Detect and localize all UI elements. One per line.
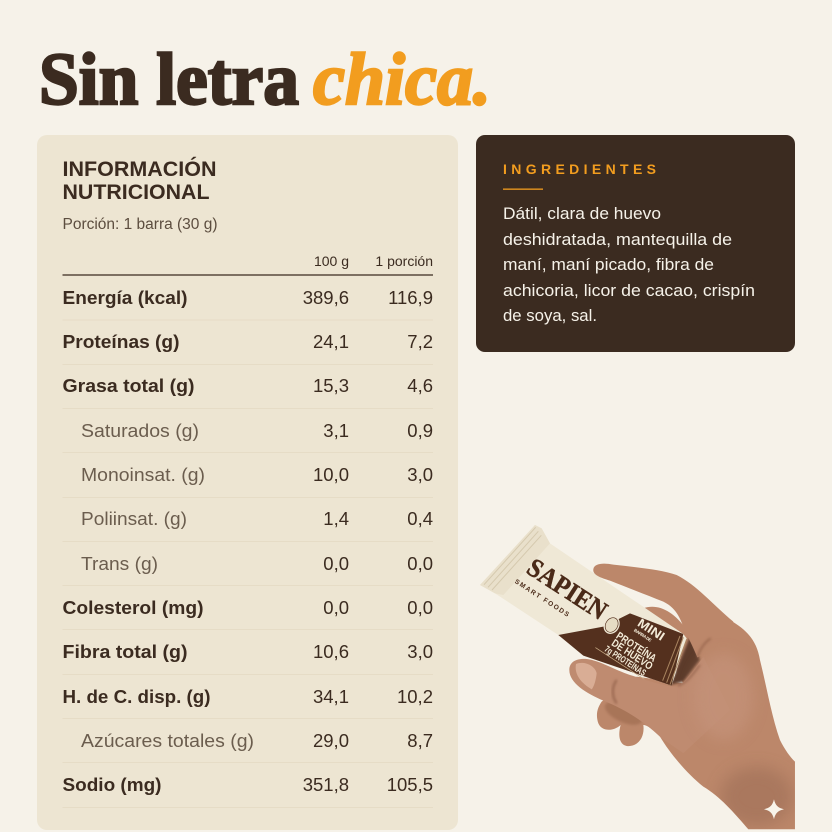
row: saturated [81, 420, 433, 441]
row: cholesterol: Colesterol (mg) [62, 598, 204, 618]
illustration: hand holding bar [480, 525, 795, 829]
row: cholesterol [62, 597, 433, 618]
row: total sugars: 8,7 [407, 730, 433, 751]
serving size: Porción: 1 barra (30 g) [62, 216, 218, 233]
title: Sin letra [39, 39, 299, 121]
ingredients list [503, 204, 755, 325]
thumb [569, 657, 730, 753]
bar brand text: SMART FOODS [513, 578, 571, 619]
row: polyunsaturated: 1,4 [323, 508, 349, 529]
row: trans [81, 553, 433, 574]
row: sodium [62, 774, 433, 795]
row: total sugars: Azúcares totales (g) [81, 731, 254, 751]
row: cholesterol: 0,0 [407, 597, 433, 618]
row: monounsaturated: Monoinsat. (g) [81, 465, 205, 485]
row: total fat: 4,6 [407, 375, 433, 396]
row: energy [62, 287, 433, 308]
heading: ingredients: INGREDIENTES [503, 161, 656, 177]
row: carbohydrates: 34,1 [313, 686, 349, 707]
row: carbohydrates: H. de C. disp. (g) [62, 687, 211, 707]
index finger [593, 564, 733, 657]
bar flavor text: MINI [635, 616, 667, 644]
row: monounsaturated: 10,0 [313, 464, 349, 485]
title: chica. [313, 39, 491, 121]
hand shading [602, 637, 700, 730]
bar brand text: SAPIEN [522, 552, 613, 626]
row: sodium: 351,8 [303, 774, 349, 795]
row: total sugars [81, 730, 433, 751]
row: protein [62, 331, 433, 352]
row: total fat: Grasa total (g) [62, 376, 194, 396]
ingredients list: de soya, sal. [503, 306, 597, 325]
ingredients list: deshidratada, mantequilla de [503, 230, 732, 249]
bar flavor text: PROTEÍNA [614, 629, 659, 665]
thumbnail [576, 663, 597, 689]
panel: nutrition information [37, 135, 458, 830]
row: trans: 0,0 [407, 553, 433, 574]
row: polyunsaturated: Poliinsat. (g) [81, 509, 187, 529]
row: saturated: 3,1 [323, 420, 349, 441]
row: cholesterol: 0,0 [323, 597, 349, 618]
row: total fat [62, 375, 433, 396]
row: monounsaturated [81, 464, 433, 485]
bar flavor text: BARRA DE [633, 628, 653, 643]
row: fiber: 10,6 [313, 641, 349, 662]
ingredients list: maní, maní picado, fibra de [503, 255, 714, 274]
panel: ingredients [476, 135, 795, 352]
row: saturated: 0,9 [407, 420, 433, 441]
sparkle icon [764, 799, 784, 819]
row: protein: 24,1 [313, 331, 349, 352]
panel: nutrition information: NUTRICIONAL [62, 181, 210, 204]
ingredients list: achicoria, licor de cacao, crispín [503, 281, 755, 300]
hand palm and fingers [597, 607, 795, 829]
row: fiber: Fibra total (g) [62, 642, 188, 662]
row: carbohydrates [62, 686, 433, 707]
row: total fat: 15,3 [313, 375, 349, 396]
row: saturated: Saturados (g) [81, 421, 199, 441]
row: sodium: 105,5 [387, 774, 433, 795]
row: trans: Trans (g) [81, 554, 158, 574]
bar flavor text: 7g PROTEÍNAS [603, 644, 648, 678]
column headers [314, 253, 433, 269]
row: energy: Energía (kcal) [62, 288, 188, 308]
row: carbohydrates: 10,2 [397, 686, 433, 707]
row: energy: 389,6 [303, 287, 349, 308]
row: fiber: 3,0 [407, 641, 433, 662]
row: polyunsaturated: 0,4 [407, 508, 433, 529]
column headers: 1 porción [375, 253, 433, 269]
row: energy: 116,9 [388, 287, 433, 308]
snack bar [480, 525, 687, 686]
row: trans: 0,0 [323, 553, 349, 574]
row: fiber [62, 641, 433, 662]
bar flavor text [595, 604, 673, 679]
row: sodium: Sodio (mg) [62, 775, 162, 795]
row: polyunsaturated [81, 508, 433, 529]
heading: nutrition: INFORMACIÓN [62, 157, 216, 181]
row: protein: Proteínas (g) [62, 332, 180, 352]
hand highlights and creases [613, 638, 793, 827]
row: total sugars: 29,0 [313, 730, 349, 751]
bar flavor text: DE HUEVO [609, 637, 655, 673]
title [39, 39, 491, 121]
column headers: 100 g [314, 253, 349, 269]
row: protein: 7,2 [407, 331, 433, 352]
row: monounsaturated: 3,0 [407, 464, 433, 485]
ingredients list: Dátil, clara de huevo [503, 204, 661, 223]
